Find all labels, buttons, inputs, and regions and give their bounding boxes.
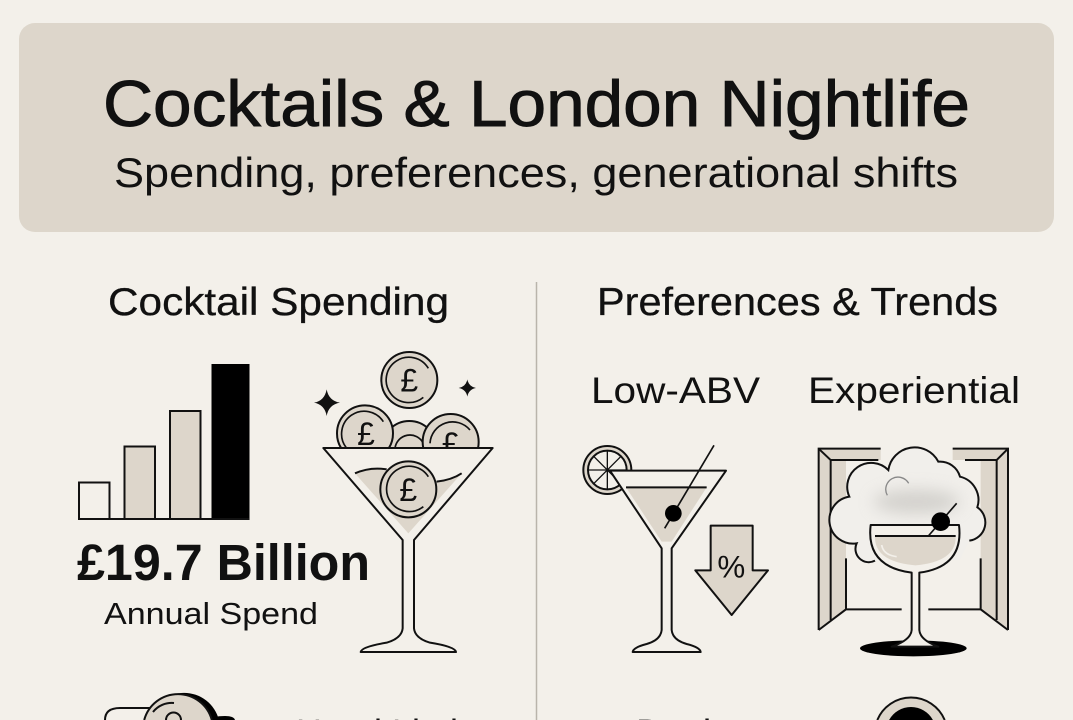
icon: martini glass with pound coins: £ <box>442 426 460 462</box>
icon: martini glass with pound coins <box>314 352 493 652</box>
bar chart: rising spend <box>78 365 249 519</box>
icon: bottom round emblem <box>877 698 945 720</box>
heading: cocktail spending: Cocktail Spending <box>108 281 449 324</box>
panel: preferences and trends <box>583 281 1020 720</box>
icon: smoking coupe in doorway <box>819 447 1008 656</box>
icon: martini glass with pound coins: £ <box>400 363 418 399</box>
icon: bottom coin and card <box>105 693 235 720</box>
icon: low-ABV martini with citrus and down arrow <box>583 445 768 652</box>
figure: annual spend: £19.7 Billion <box>77 534 370 591</box>
subtitle: Spending, preferences, generational shifts <box>114 149 958 196</box>
icon: low-ABV martini with citrus and down arrow: % <box>717 549 745 584</box>
title: Cocktails & London Nightlife <box>103 67 970 140</box>
icon: martini glass with pound coins: £ <box>357 416 375 452</box>
panel: cocktail spending <box>77 281 493 720</box>
icon: martini glass with pound coins: £ <box>399 472 417 508</box>
header banner <box>19 23 1054 232</box>
heading: preferences and trends: Preferences & Trends <box>597 281 998 324</box>
label: experiential: Experiential <box>808 370 1020 411</box>
label: low-ABV: Low-ABV <box>591 370 760 411</box>
label: annual spend: Annual Spend <box>104 596 318 631</box>
